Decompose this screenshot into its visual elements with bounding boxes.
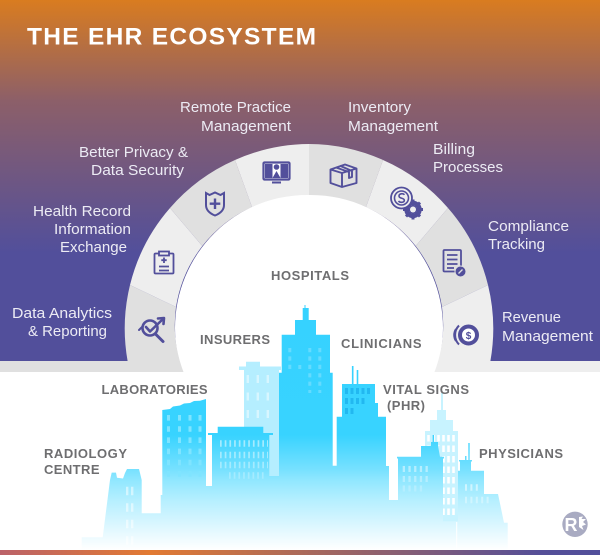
label: inventory management — [348, 100, 438, 135]
segment: privacy — [170, 160, 252, 246]
far left building windows — [127, 487, 132, 546]
label: compliance tracking: Tracking — [488, 237, 545, 253]
label: better privacy and data security — [79, 145, 188, 179]
segment: inventory — [309, 144, 383, 207]
label: health record information exchange: Health Record — [33, 204, 131, 220]
segment: health record — [130, 208, 202, 307]
label: data analytics and reporting: Data Analytics — [12, 306, 112, 322]
label: health record information exchange: Exchange — [60, 240, 127, 256]
label: insurers: INSURERS — [200, 332, 270, 347]
label: physicians: PHYSICIANS — [479, 446, 563, 461]
label: radiology centre: RADIOLOGY — [44, 446, 127, 461]
icon: coin and gear — [391, 188, 423, 220]
label: laboratories: LABORATORIES — [102, 382, 208, 397]
label: inventory management: Inventory — [348, 100, 412, 116]
logo badge: R — [564, 515, 578, 535]
semicircular ring of capabilities — [0, 144, 600, 462]
label: revenue management: Management — [502, 329, 593, 345]
label: health record information exchange: Information — [54, 222, 131, 238]
label: revenue management — [502, 310, 593, 345]
title: THE EHR ECOSYSTEM — [27, 24, 316, 50]
label: vital signs (PHR): VITAL SIGNS — [383, 382, 469, 397]
label: revenue management: Revenue — [502, 310, 561, 326]
label: inventory management: Management — [348, 119, 438, 135]
wide building window stripes — [220, 444, 268, 476]
label: remote practice management: Remote Practice — [180, 100, 291, 116]
icon: shield with plus — [206, 192, 224, 216]
segment: revenue — [434, 285, 600, 372]
segment: billing — [366, 160, 448, 246]
label: billing processes: Processes — [433, 160, 503, 176]
icon: revenue coin — [454, 326, 477, 344]
thin white divider near right tower — [456, 522, 458, 550]
segment: compliance — [416, 208, 488, 307]
far right building windows — [465, 488, 491, 500]
label: data analytics and reporting — [12, 306, 112, 340]
header background gradient — [0, 0, 600, 361]
pale building windows — [248, 375, 268, 418]
icon: package box — [330, 164, 356, 187]
label: remote practice management: Management — [201, 119, 291, 135]
central tower windows — [290, 348, 320, 393]
pale tower behind right — [425, 393, 458, 522]
label: compliance tracking — [488, 219, 569, 253]
icon: monitor with doctor — [264, 162, 290, 184]
label: hospitals: HOSPITALS — [271, 268, 349, 283]
icon: analytics magnifier — [139, 318, 164, 342]
icon: revenue coin: $ — [466, 331, 472, 342]
inner white disc — [175, 194, 443, 462]
label: billing processes — [433, 142, 503, 176]
label: remote practice management — [180, 100, 291, 135]
label: radiology centre — [44, 446, 127, 477]
city skyline illustration — [82, 305, 508, 550]
label: vital signs (PHR): (PHR) — [387, 398, 425, 413]
label: better privacy and data security: Data Security — [91, 163, 185, 179]
bottom gradient strip — [0, 550, 600, 555]
label: billing processes: Billing — [433, 142, 475, 158]
label: health record information exchange — [33, 204, 131, 256]
pale building behind centre — [239, 362, 281, 476]
pale tower windows — [428, 435, 454, 516]
label: better privacy and data security: Better Privacy & — [79, 145, 188, 161]
label: data analytics and reporting: & Reporting — [28, 324, 107, 340]
segment: remote practice — [235, 144, 309, 207]
label: compliance tracking: Compliance — [488, 219, 569, 235]
logo badge — [562, 512, 588, 537]
segment: data analytics — [0, 285, 184, 372]
right building windows — [403, 469, 431, 488]
label: clinicians: CLINICIANS — [341, 336, 422, 351]
label: radiology centre: CENTRE — [44, 462, 100, 477]
icon: compliance document — [444, 250, 466, 277]
label: vital signs (PHR) — [383, 382, 469, 413]
laboratory windows — [168, 415, 200, 478]
icon: clipboard — [154, 252, 174, 274]
right-centre tower windows — [346, 388, 368, 414]
white lower background — [0, 361, 600, 550]
main skyline silhouette — [82, 305, 508, 550]
